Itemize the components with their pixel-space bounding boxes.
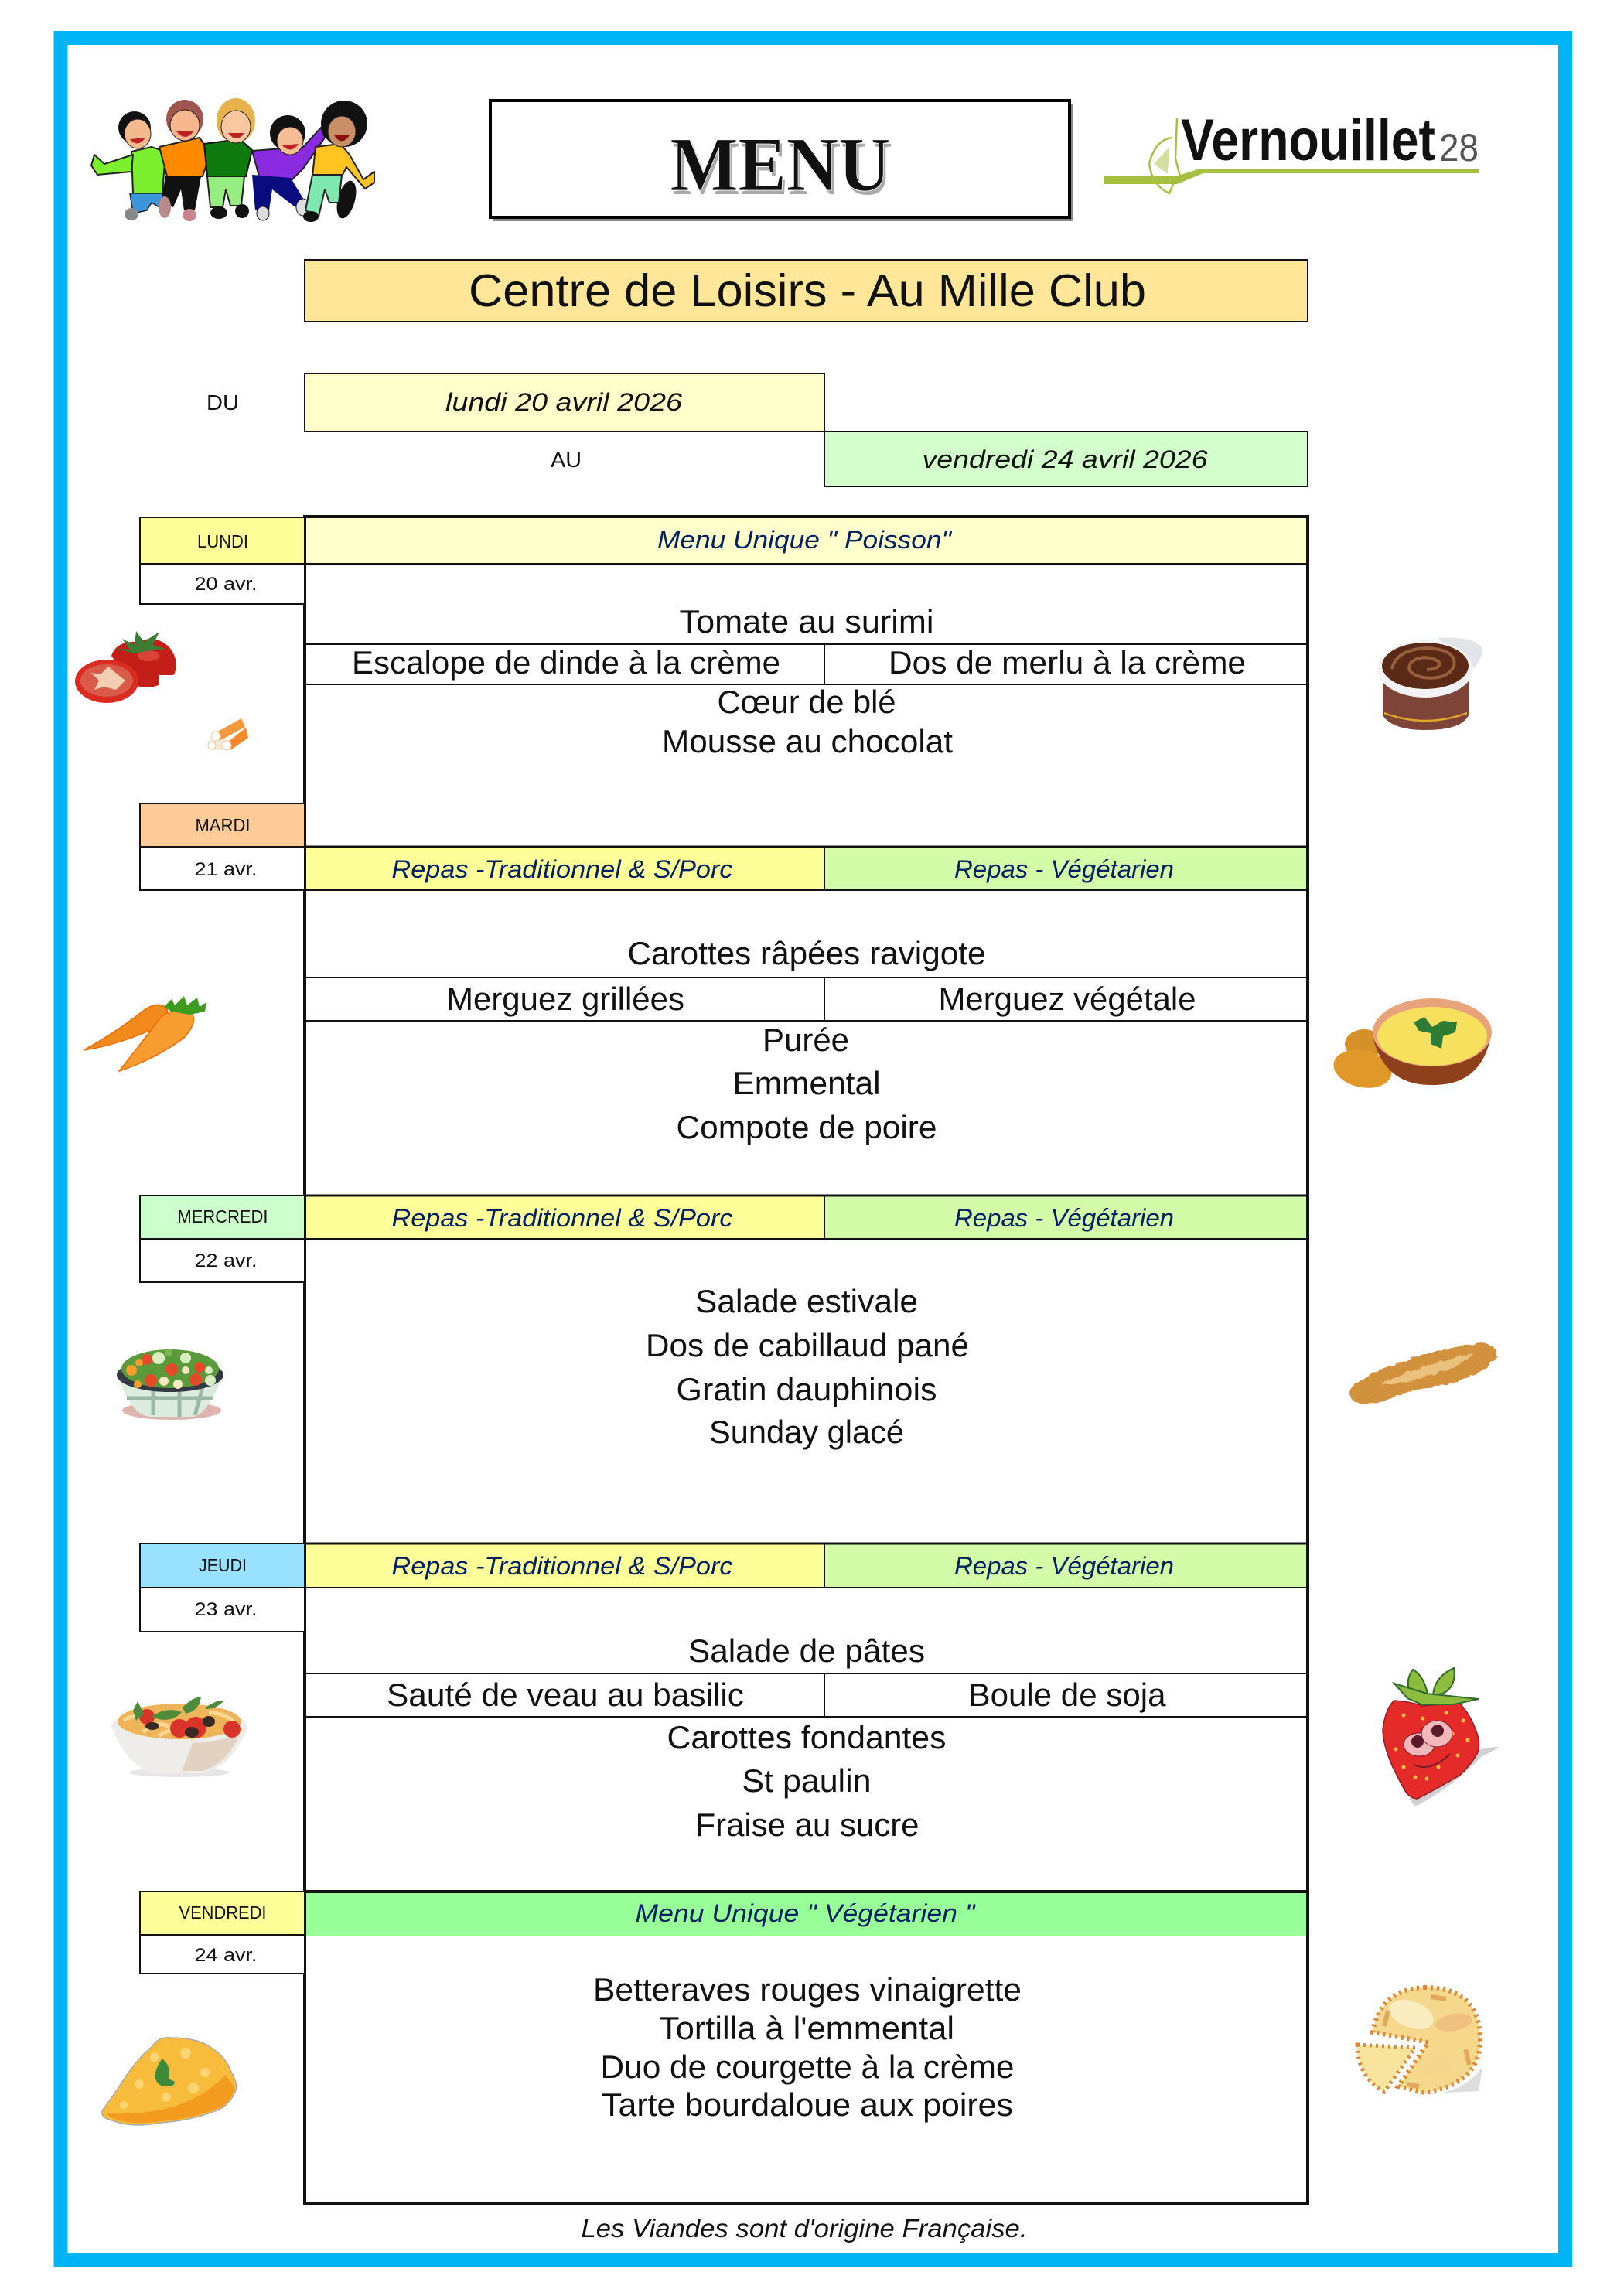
- monday header: [305, 517, 1308, 564]
- wednesday dishes: Gratin dauphinois: [676, 1371, 937, 1407]
- day label: lundi: [140, 517, 305, 604]
- logo: Vernouillet 28: Vernouillet: [1181, 107, 1435, 173]
- friday dishes: Tarte bourdaloue aux poires: [602, 2086, 1013, 2123]
- title box: MENU: MENU: [673, 125, 892, 211]
- icon: strawberry: [1383, 1668, 1500, 1806]
- date range: du / au: lundi 20 avril 2026: [445, 388, 682, 416]
- monday dishes: Tomate au surimi: [679, 603, 934, 640]
- heading band: Centre de Loisirs: [305, 260, 1308, 322]
- tuesday dishes: Purée: [763, 1022, 849, 1058]
- day label: vendredi: 24 avr.: [195, 1945, 257, 1966]
- tuesday dishes: Merguez végétale: [939, 981, 1196, 1017]
- thursday dishes: St paulin: [742, 1762, 871, 1799]
- day label: mercredi: [140, 1196, 305, 1282]
- day label: vendredi: VENDREDI: [179, 1902, 266, 1922]
- logo: Vernouillet 28: 28: [1439, 126, 1479, 169]
- icon: mashed potato bowl: [1330, 998, 1492, 1093]
- footnote: Les Viandes sont d'origine Française.: [582, 2214, 1027, 2243]
- tuesday dishes: Carottes râpées ravigote: [628, 935, 985, 971]
- day label: jeudi: 23 avr.: [195, 1599, 257, 1620]
- icon: surimi sticks: [207, 718, 248, 750]
- wednesday dishes: [646, 1283, 969, 1450]
- day label: lundi: LUNDI: [197, 531, 248, 551]
- day label: vendredi: [140, 1892, 305, 1974]
- tuesday header: Repas - Végétarien: [954, 855, 1174, 883]
- day label: mercredi: MERCREDI: [178, 1206, 268, 1226]
- thursday header: [305, 1544, 1308, 1588]
- wednesday header: Repas -Traditionnel & S/Porc: [391, 1204, 733, 1232]
- monday dishes: Cœur de blé: [718, 684, 896, 720]
- friday dishes: [593, 1971, 1022, 2123]
- friday dishes: Duo de courgette à la crème: [600, 2049, 1015, 2085]
- day label: mardi: MARDI: [195, 815, 251, 835]
- day label: mardi: [140, 803, 305, 890]
- monday dishes: Escalope de dinde à la crème: [352, 644, 780, 681]
- friday dishes: Tortilla à l'emmental: [659, 2010, 954, 2046]
- tuesday dishes: Emmental: [733, 1065, 880, 1101]
- day label: mercredi: 22 avr.: [195, 1250, 257, 1271]
- friday header: [305, 1892, 1308, 1936]
- day label: mardi: 21 avr.: [195, 859, 257, 880]
- icon: salad bowl: [117, 1349, 223, 1420]
- wednesday dishes: Dos de cabillaud pané: [646, 1327, 969, 1363]
- day label: jeudi: JEUDI: [199, 1555, 247, 1575]
- title box: MENU: MENU: [670, 121, 891, 207]
- icon: tomatoes: [75, 631, 176, 703]
- tuesday header: [305, 847, 1308, 890]
- thursday dishes: Salade de pâtes: [688, 1632, 925, 1669]
- date range: du / au: DU: [206, 391, 239, 415]
- tuesday dishes: Compote de poire: [676, 1109, 937, 1145]
- date range: du / au: AU: [551, 448, 582, 472]
- friday header: Menu Unique " Végétarien ": [636, 1899, 976, 1927]
- day label: lundi: 20 avr.: [195, 574, 257, 595]
- monday dishes: Dos de merlu à la crème: [889, 644, 1246, 681]
- tuesday dishes: [446, 935, 1196, 1145]
- thursday dishes: Fraise au sucre: [696, 1806, 919, 1843]
- monday dishes: Mousse au chocolat: [662, 723, 953, 759]
- wednesday header: Repas - Végétarien: [954, 1204, 1174, 1232]
- wednesday dishes: Salade estivale: [695, 1283, 918, 1319]
- logo: Vernouillet 28: [1104, 107, 1479, 193]
- friday dishes: Betteraves rouges vinaigrette: [593, 1971, 1022, 2008]
- tuesday header: Repas -Traditionnel & S/Porc: [391, 855, 733, 883]
- day label: jeudi: [140, 1544, 305, 1632]
- tuesday dishes: Merguez grillées: [446, 981, 684, 1017]
- thursday header: Repas - Végétarien: [954, 1552, 1174, 1580]
- monday header: Menu Unique " Poisson": [657, 526, 953, 554]
- panel: menu table: [305, 517, 1308, 2203]
- icon: pear tart: [1357, 1987, 1482, 2094]
- wednesday header: [305, 1196, 1308, 1239]
- thursday dishes: Sauté de veau au basilic: [387, 1677, 744, 1713]
- icon: carrots: [84, 996, 206, 1071]
- wednesday dishes: Sunday glacé: [709, 1414, 904, 1450]
- icon: breaded fish: [1349, 1343, 1497, 1404]
- icon: omelette: [102, 2038, 237, 2125]
- thursday dishes: [387, 1632, 1166, 1843]
- date range: du / au: vendredi 24 avril 2026: [922, 445, 1208, 473]
- title box: MENU: [490, 101, 1073, 221]
- icon: group of children: [91, 98, 374, 222]
- icon: pasta salad bowl: [111, 1697, 247, 1777]
- icon: chocolate mousse: [1377, 638, 1482, 730]
- monday dishes: [352, 603, 1246, 759]
- date range: du / au: [206, 374, 1308, 486]
- thursday dishes: Carottes fondantes: [667, 1719, 947, 1755]
- thursday dishes: Boule de soja: [968, 1677, 1166, 1713]
- thursday header: Repas -Traditionnel & S/Porc: [391, 1552, 733, 1580]
- heading band: Centre de Loisirs: Centre de Loisirs - Au Mille Club: [469, 265, 1146, 316]
